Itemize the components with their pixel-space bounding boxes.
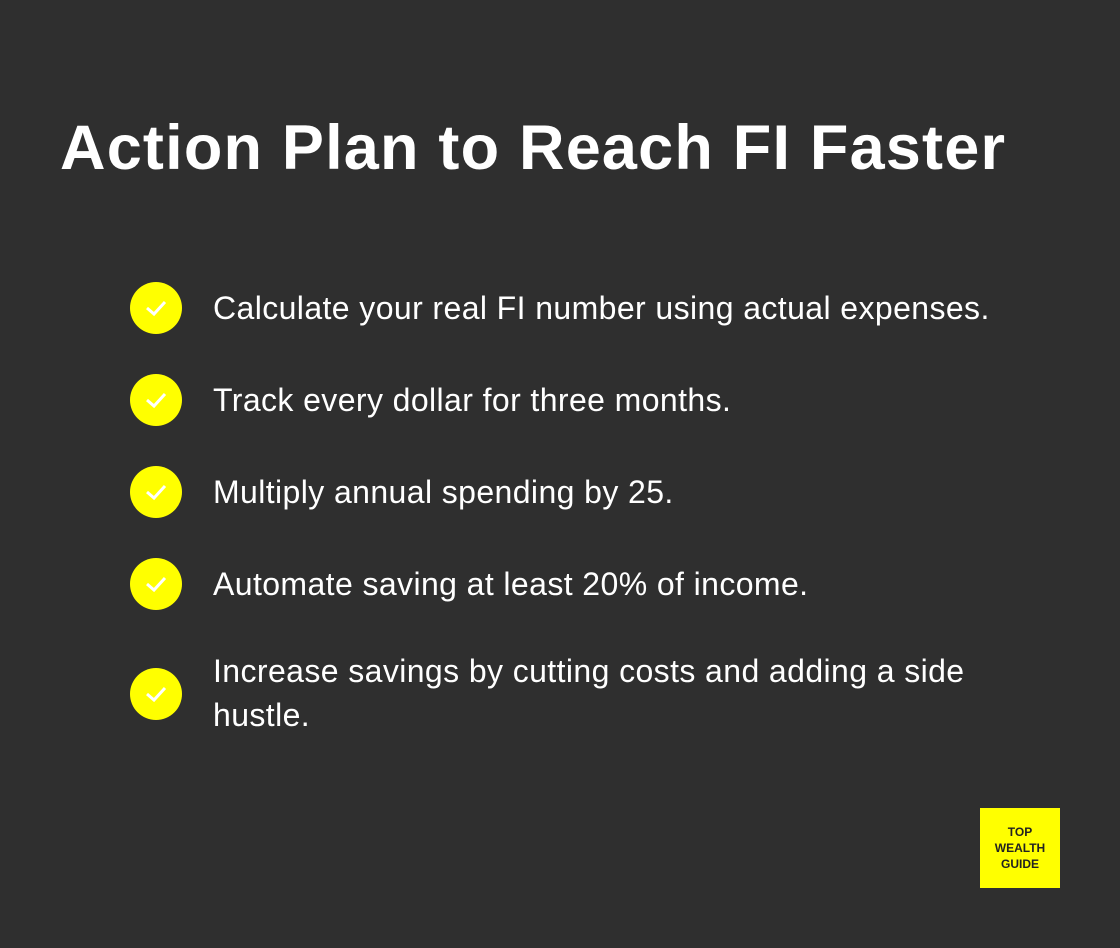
icon: check [130,668,182,720]
item 4 [130,558,808,610]
icon: check [130,282,182,334]
text 5: hustle. [213,697,310,733]
item 1 [130,282,990,334]
title: Action Plan to Reach FI Faster [60,113,1006,183]
item 5 [130,653,965,733]
text 2: Track every dollar for three months. [213,382,731,418]
text 5: Increase savings by cutting costs and adding a side [213,653,965,689]
text 4: Automate saving at least 20% of income. [213,566,808,602]
icon: check [130,466,182,518]
text 1: Calculate your real FI number using actual expenses. [213,290,990,326]
icon: check [130,558,182,610]
text 5 [213,653,965,733]
item 2 [130,374,731,426]
logo: GUIDE [1001,857,1039,871]
logo [980,808,1060,888]
item 3 [130,466,674,518]
logo: TOP [1008,825,1032,839]
icon: check [130,374,182,426]
text 3: Multiply annual spending by 25. [213,474,674,510]
logo: WEALTH [995,841,1045,855]
